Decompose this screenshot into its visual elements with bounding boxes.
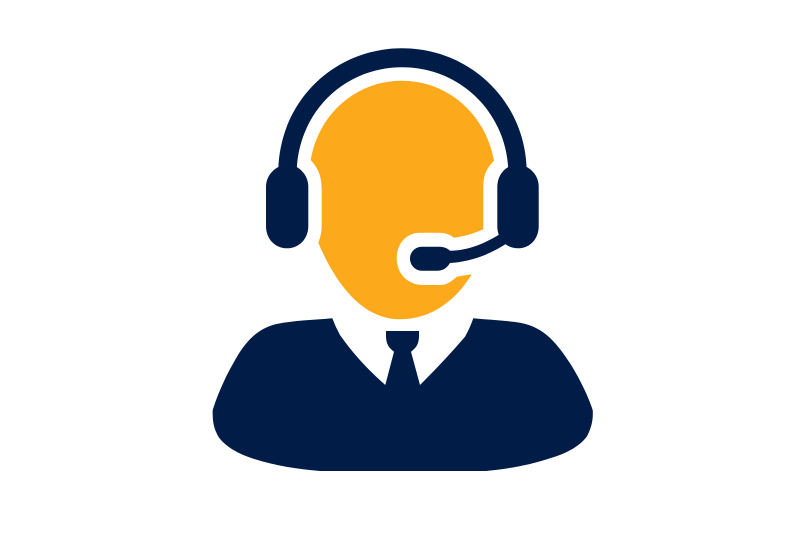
icon: right ear cup — [497, 167, 539, 248]
icon: head — [311, 81, 494, 319]
icon: headband — [278, 48, 527, 170]
icon: suit and shoulders — [213, 318, 593, 471]
icon: microphone boom — [410, 234, 512, 271]
icon: left ear cup — [266, 167, 308, 248]
